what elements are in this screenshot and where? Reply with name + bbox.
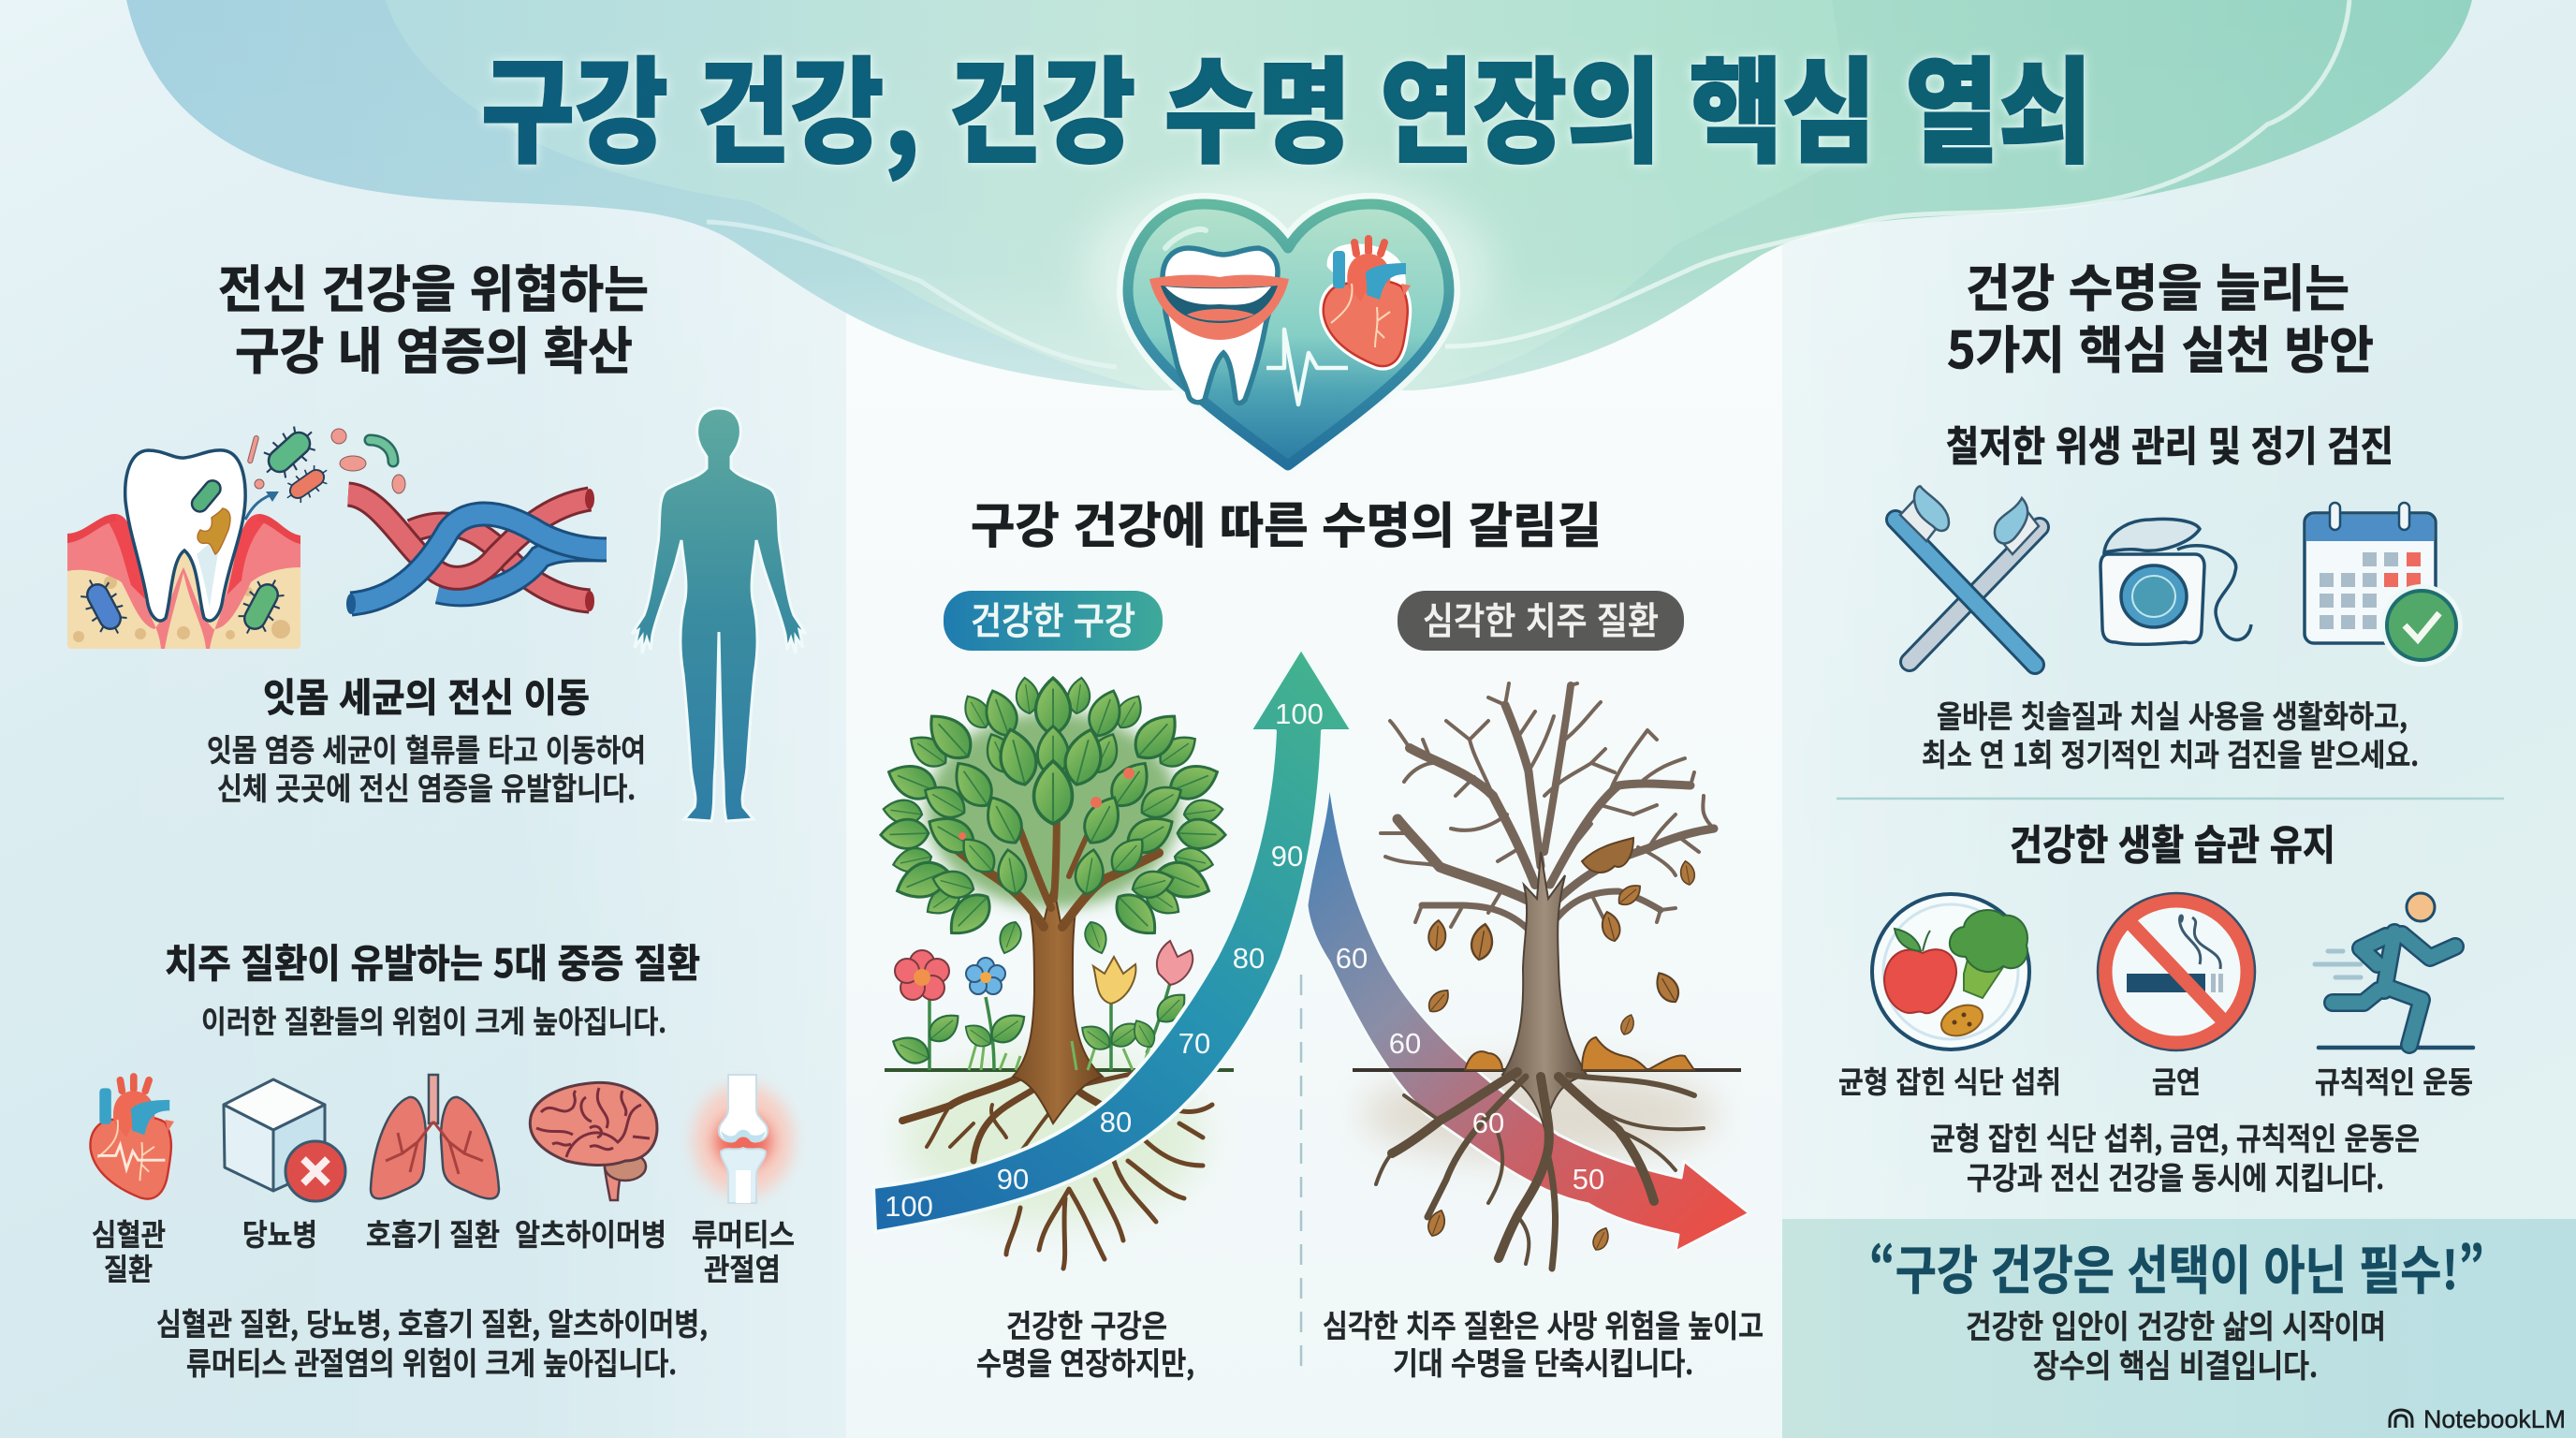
text block: disease caption: 기대 수명을 단축시킵니다. <box>1393 1339 1693 1384</box>
callout: oral health is essential: 장수의 핵심 비결입니다. <box>2033 1341 2318 1387</box>
icon: dental floss <box>2100 519 2251 644</box>
chart arrow: healthy lifespan rising: 100 <box>885 1190 933 1223</box>
chart arrow: healthy lifespan rising: 80 <box>1100 1106 1132 1138</box>
heading: left panel: 구강 내 염증의 확산 <box>235 310 633 384</box>
text block: five diseases heading <box>165 932 700 1042</box>
chart arrow: healthy lifespan rising: 100 <box>1275 697 1324 730</box>
text block: disease summary: 심혈관 질환, 당뇨병, 호흡기 질환, 알츠하이머병, <box>156 1299 708 1344</box>
labels: lifestyle items: 금연 <box>2152 1059 2201 1102</box>
icon: inflamed joint <box>693 1075 794 1203</box>
header wave background <box>126 0 2472 390</box>
text block: hygiene tips <box>1922 692 2419 775</box>
illustration: garden flowers <box>888 941 1193 1070</box>
text block: healthy caption <box>976 1301 1194 1384</box>
labels: lifestyle items <box>1838 1059 2473 1102</box>
icon: infected tooth in gum <box>67 418 405 649</box>
chart arrow: healthy lifespan rising: 70 <box>1178 1027 1210 1060</box>
icon: no smoking <box>2098 893 2255 1050</box>
labels: disease names <box>92 1211 795 1289</box>
heading: right panel: 5가지 핵심 실천 방안 <box>1947 309 2374 383</box>
icon: calendar with check <box>2305 503 2463 667</box>
title: 구강 건강, 건강 수명 연장의 핵심 열쇠 <box>481 21 2092 186</box>
icon: heart emblem with tooth and heart <box>1128 204 1449 465</box>
labels: disease names: 당뇨병 <box>242 1211 317 1255</box>
logo: NotebookLM: NotebookLM <box>2423 1405 2566 1433</box>
icon: cardiovascular heart <box>91 1077 174 1199</box>
heading: right panel: 건강 수명을 늘리는 <box>1966 247 2349 321</box>
text block: bacteria spread: 잇몸 염증 세균이 혈류를 타고 이동하여 <box>207 726 646 770</box>
text block: five diseases heading: 이러한 질환들의 위험이 크게 높아집니다. <box>201 997 666 1042</box>
callout background panel <box>1782 1219 2576 1438</box>
illustration: dead tree <box>1353 683 1741 1269</box>
soil shading under dead tree <box>1362 1067 1718 1161</box>
icon: toothbrushes <box>1895 486 2040 665</box>
pill: periodontal disease: 심각한 치주 질환 <box>1423 591 1659 645</box>
heading: left panel: 전신 건강을 위협하는 <box>218 248 649 322</box>
labels: falling arrow values: 60 <box>1472 1107 1504 1139</box>
text block: five diseases heading: 치주 질환이 유발하는 5대 중증 질환 <box>165 932 700 990</box>
icon: brain <box>530 1082 657 1200</box>
labels: disease names: 질환 <box>104 1246 153 1289</box>
text block: hygiene tips: 최소 연 1회 정기적인 치과 검진을 받으세요. <box>1922 730 2419 775</box>
text block: healthy caption: 건강한 구강은 <box>1006 1301 1167 1346</box>
labels: falling arrow values: 60 <box>1389 1027 1421 1060</box>
text block: disease summary: 류머티스 관절염의 위험이 크게 높아집니다. <box>186 1339 677 1384</box>
labels: disease names: 알츠하이머병 <box>515 1211 666 1255</box>
chart arrow: healthy lifespan rising: 90 <box>1271 840 1303 873</box>
text block: healthy caption: 수명을 연장하지만, <box>976 1339 1194 1384</box>
chart arrow: lifespan falling with disease <box>1307 779 1749 1252</box>
text block: disease caption <box>1323 1301 1764 1384</box>
chart arrow: healthy lifespan rising <box>873 648 1353 1232</box>
text block: lifestyle summary: 구강과 전신 건강을 동시에 지킵니다. <box>1967 1153 2384 1198</box>
pill: healthy mouth: 건강한 구강 <box>971 591 1135 645</box>
divider: center dashed line <box>1300 975 1302 1376</box>
icon: lungs <box>371 1075 499 1198</box>
text block: hygiene tips: 올바른 칫솔질과 치실 사용을 생활화하고, <box>1937 692 2408 737</box>
subheading: hygiene: 철저한 위생 관리 및 정기 검진 <box>1946 413 2393 473</box>
text block: bacteria spread: 잇몸 세균의 전신 이동 <box>263 667 590 724</box>
icon: runner <box>2315 893 2473 1048</box>
heading: right panel <box>1947 247 2374 383</box>
text block: bacteria spread: 신체 곳곳에 전신 염증을 유발합니다. <box>217 764 636 809</box>
icon: sugar cube <box>224 1079 345 1201</box>
icon: entwined blood vessels <box>346 489 607 614</box>
heading: left panel <box>218 248 649 384</box>
heading: center panel: 구강 건강에 따른 수명의 갈림길 <box>971 487 1602 557</box>
icon: human body silhouette <box>632 408 806 821</box>
callout: oral health is essential: 건강한 입안이 건강한 삶의 시작이며 <box>1966 1301 2386 1347</box>
text block: lifestyle summary <box>1930 1114 2420 1198</box>
chart arrow: healthy lifespan rising: 90 <box>997 1163 1029 1196</box>
labels: lifestyle items: 규칙적인 운동 <box>2315 1059 2473 1102</box>
text block: disease summary <box>156 1299 708 1384</box>
labels: disease names: 심혈관 <box>92 1211 166 1255</box>
labels: falling arrow values <box>1336 942 1604 1196</box>
chart arrow: healthy lifespan rising: 80 <box>1233 942 1265 975</box>
text block: disease caption: 심각한 치주 질환은 사망 위험을 높이고 <box>1323 1301 1764 1346</box>
labels: lifestyle items: 균형 잡힌 식단 섭취 <box>1838 1059 2061 1102</box>
labels: disease names: 호흡기 질환 <box>366 1211 500 1255</box>
callout: oral health is essential: “구강 건강은 선택이 아닌 필수!” <box>1869 1229 2484 1305</box>
labels: disease names: 관절염 <box>704 1246 781 1289</box>
subheading: healthy lifestyle: 건강한 생활 습관 유지 <box>2010 812 2335 872</box>
labels: disease names: 류머티스 <box>692 1211 795 1255</box>
callout: oral health is essential <box>1869 1229 2484 1387</box>
icon: plate of food <box>1872 894 2029 1049</box>
illustration: healthy tree <box>880 676 1234 1269</box>
text block: lifestyle summary: 균형 잡힌 식단 섭취, 금연, 규칙적인 운동은 <box>1930 1114 2420 1159</box>
labels: falling arrow values: 60 <box>1336 942 1368 975</box>
text block: bacteria spread <box>207 667 646 809</box>
labels: falling arrow values: 50 <box>1573 1163 1604 1196</box>
